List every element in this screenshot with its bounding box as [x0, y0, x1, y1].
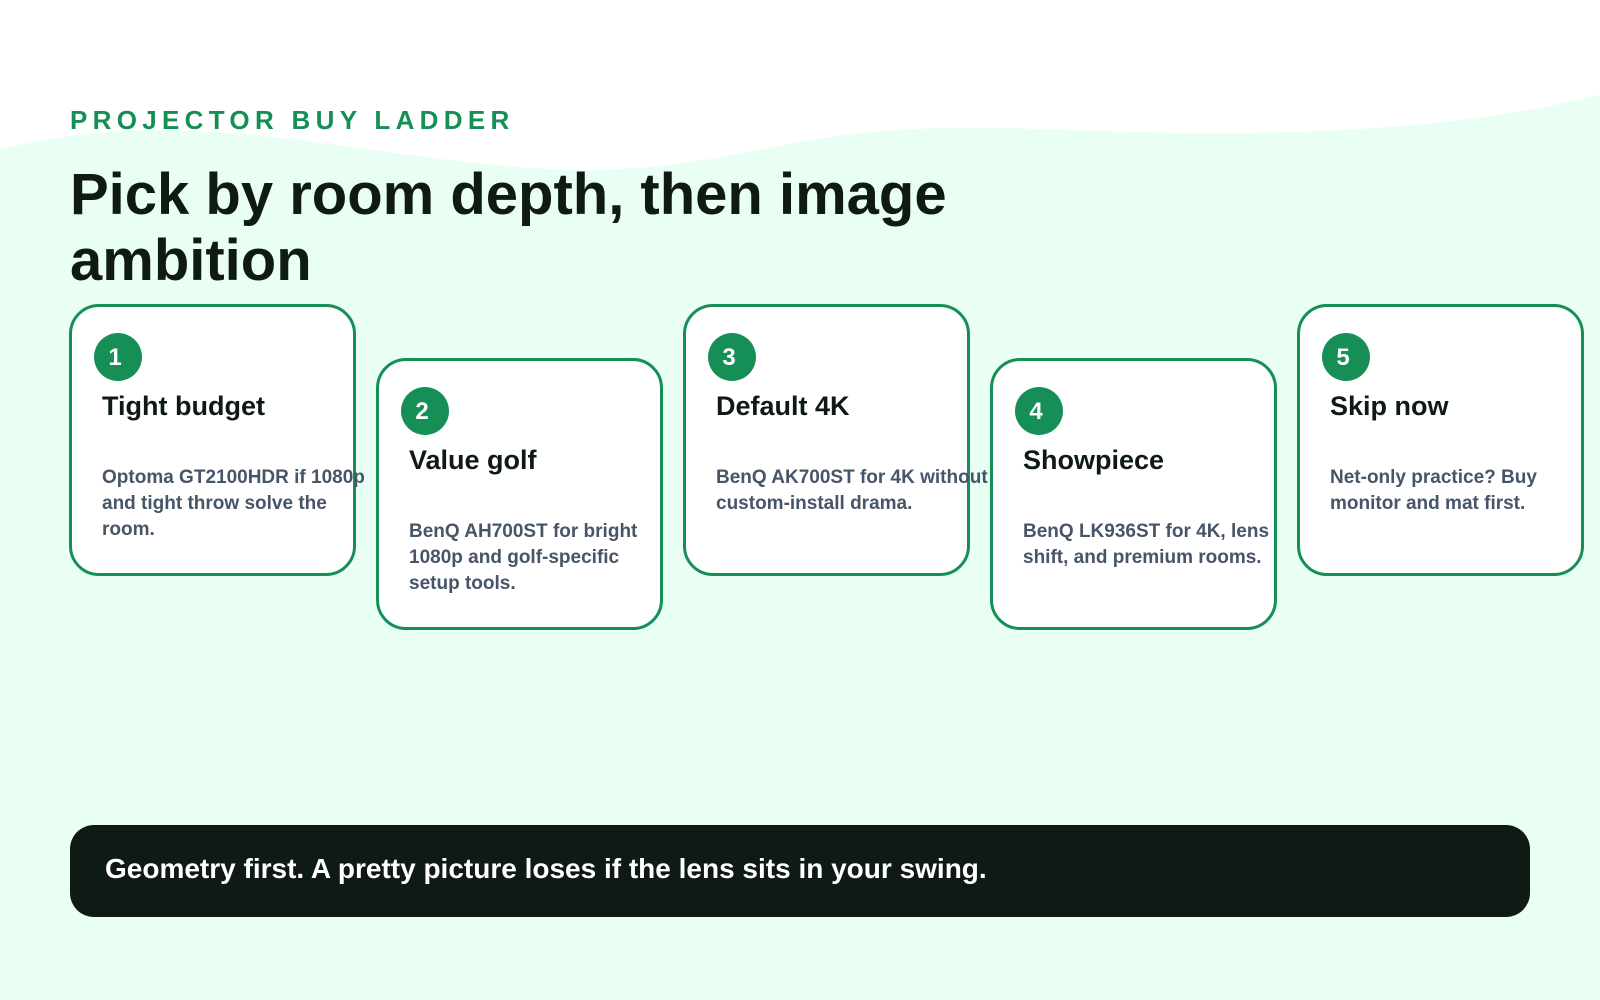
card 3 text: BenQ AK700ST for 4K without: [716, 467, 988, 488]
card 2 text: 1080p and golf-specific: [409, 547, 619, 568]
step number 2: 2: [415, 398, 429, 425]
card 3: default 4K: [683, 304, 970, 576]
card 2 text: setup tools.: [409, 573, 516, 594]
card 1: tight budget: [69, 304, 356, 576]
card 2: value golf: [376, 358, 663, 630]
card 5 text: monitor and mat first.: [1330, 493, 1525, 514]
card 1 text: room.: [102, 519, 155, 540]
card 4 text: BenQ LK936ST for 4K, lens: [1023, 521, 1269, 542]
step number 5: 5: [1336, 344, 1350, 371]
card 5: skip now: [1297, 304, 1584, 576]
card 4 text: shift, and premium rooms.: [1023, 547, 1262, 568]
card 4: showpiece: [990, 358, 1277, 630]
step number 4: 4: [1029, 398, 1043, 425]
title: Pick by room depth, then image: [70, 162, 947, 227]
step number 4: [1015, 387, 1063, 435]
step number 1: [94, 333, 142, 381]
card 4 text: [1023, 521, 1269, 568]
step number 3: 3: [722, 344, 736, 371]
step number 1: 1: [108, 344, 122, 371]
step number 2: [401, 387, 449, 435]
takeaway banner: Geometry first. A pretty picture loses if the lens sits in your swing.: [105, 853, 987, 884]
card 2 heading: Value golf: [409, 445, 537, 475]
card 3 text: custom-install drama.: [716, 493, 912, 514]
card 2 text: BenQ AH700ST for bright: [409, 521, 637, 542]
title: ambition: [70, 228, 312, 293]
card 3 heading: Default 4K: [716, 391, 850, 421]
step number 3: [708, 333, 756, 381]
card 4 heading: Showpiece: [1023, 445, 1164, 475]
card 3 text: [716, 467, 988, 514]
title: [70, 162, 947, 293]
card 1 text: [102, 467, 365, 540]
card 2 text: [409, 521, 638, 594]
card 5 text: [1330, 467, 1537, 514]
eyebrow label: PROJECTOR BUY LADDER: [70, 105, 515, 135]
card 1 text: Optoma GT2100HDR if 1080p: [102, 467, 365, 488]
takeaway banner: [70, 825, 1530, 917]
card 1 text: and tight throw solve the: [102, 493, 327, 514]
card 5 heading: Skip now: [1330, 391, 1449, 421]
step number 5: [1322, 333, 1370, 381]
card 5 text: Net-only practice? Buy: [1330, 467, 1537, 488]
card 1 heading: Tight budget: [102, 391, 265, 421]
